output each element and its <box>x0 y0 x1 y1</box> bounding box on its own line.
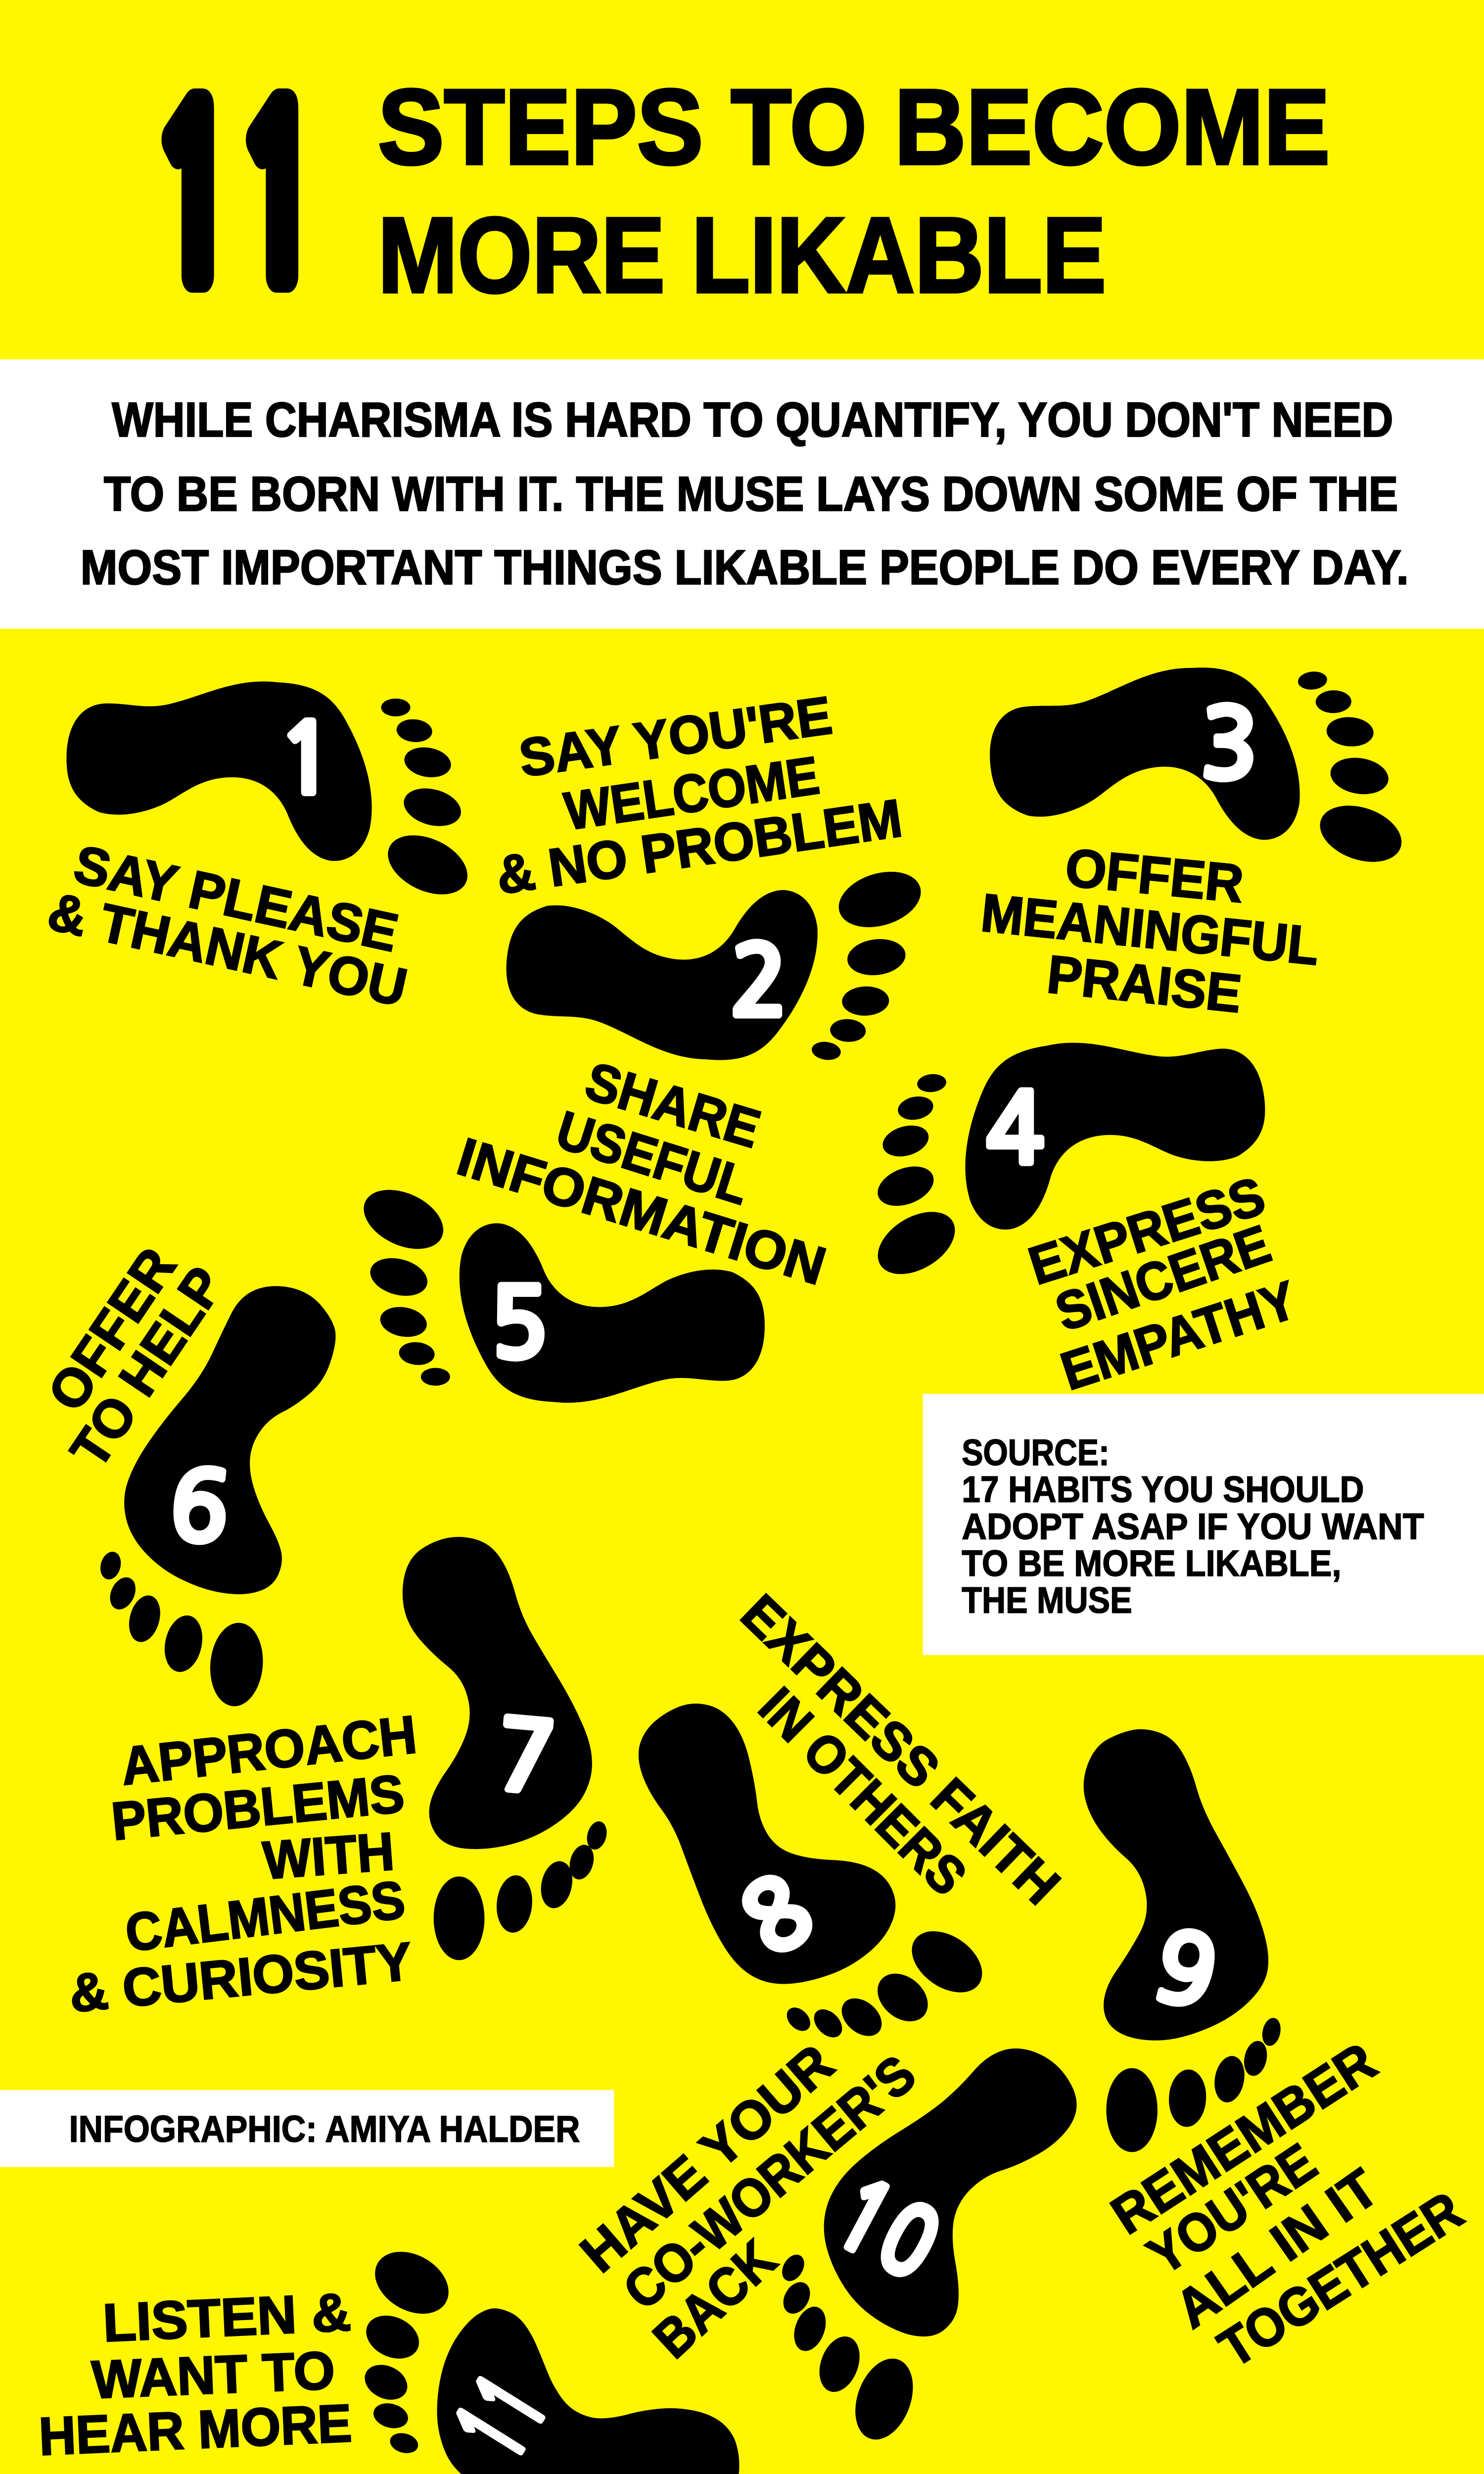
step 5 label: USEFUL <box>550 1099 756 1216</box>
step 3 label: PRAISE <box>1044 944 1244 1024</box>
title <box>378 67 1330 315</box>
step 8 footprint: 8 <box>727 1860 829 1973</box>
step 4 footprint: 4 <box>986 1082 1045 1178</box>
step 9 footprint: 9 <box>1147 1919 1224 2025</box>
step 2 label: & NO PROBLEM <box>493 788 906 905</box>
step 8 footprint <box>640 1705 992 2043</box>
panel: source: ADOPT ASAP IF YOU WANT <box>962 1506 1424 1547</box>
step 11 footprint <box>360 2240 739 2474</box>
step 7 label: & CURIOSITY <box>67 1931 415 2023</box>
step 9 label <box>1101 2031 1473 2379</box>
step 3 label: OFFER <box>1063 837 1246 914</box>
panel: credit <box>0 2090 614 2167</box>
step 2 label <box>493 685 906 905</box>
step 11 label: HEAR MORE <box>38 2393 353 2467</box>
step 11 label <box>38 2282 353 2467</box>
panel: source: THE MUSE <box>962 1580 1132 1621</box>
step 10 label: CO-WORKER'S <box>612 2044 927 2321</box>
step 1 label: & THANK YOU <box>43 881 412 1018</box>
title: STEPS TO BECOME <box>378 67 1330 187</box>
step 5 label: SHARE <box>579 1050 767 1159</box>
panel: source: 17 HABITS YOU SHOULD <box>962 1469 1364 1510</box>
step 4 label: EMPATHY <box>1054 1269 1303 1401</box>
step 10 footprint <box>779 2049 1076 2446</box>
step 4 label: EXPRESS <box>1021 1165 1272 1296</box>
step 10 footprint: 10 <box>819 2165 953 2297</box>
panel: source <box>923 1394 1484 1655</box>
step 10 label <box>569 2033 927 2369</box>
step 4 footprint <box>848 1023 1280 1289</box>
panel: source: TO BE MORE LIKABLE, <box>962 1543 1341 1584</box>
step 7 footprint: 7 <box>492 1708 559 1808</box>
step 5 label: INFORMATION <box>451 1126 833 1296</box>
step 7 label: APPROACH <box>118 1704 419 1796</box>
step 9 label: TOGETHER <box>1208 2180 1473 2379</box>
step 4 label: SINCERE <box>1048 1213 1278 1342</box>
step 5 label <box>451 1050 833 1296</box>
step 1 footprint: 1 <box>277 713 336 809</box>
step 7 label <box>67 1704 419 2023</box>
step 5 footprint: 5 <box>490 1277 549 1373</box>
step 6 footprint: 6 <box>167 1458 232 1558</box>
step 10 label: HAVE YOUR <box>569 2033 844 2284</box>
title: MORE LIKABLE <box>378 195 1106 315</box>
step 6 footprint <box>98 1287 335 1708</box>
step 3 label: MEANINGFUL <box>978 882 1322 976</box>
step 3 label <box>978 837 1322 1024</box>
title: big number 11: 11 <box>152 84 321 312</box>
panel: source: SOURCE: <box>962 1432 1110 1473</box>
step 1 label: SAY PLEASE <box>69 834 403 963</box>
step 8 label: IN OTHERS <box>748 1676 978 1906</box>
step 9 label: YOU'RE <box>1137 2132 1327 2286</box>
step 11 footprint: 11 <box>442 2362 563 2474</box>
step 11 label: LISTEN & <box>101 2282 352 2353</box>
step 7 footprint <box>403 1538 608 1959</box>
step 4 label <box>1021 1165 1303 1401</box>
step 2 label: SAY YOU'RE <box>515 685 835 788</box>
step 3 footprint: 3 <box>1200 698 1259 794</box>
step 1 footprint <box>66 681 477 906</box>
panel: intro <box>0 359 1484 629</box>
step 5 footprint <box>354 1178 765 1403</box>
step 8 label: EXPRESS FAITH <box>730 1583 1071 1915</box>
step 9 footprint <box>1084 1730 1282 2151</box>
step 7 label: CALMNESS <box>122 1869 408 1963</box>
step 2 footprint: 2 <box>730 935 788 1031</box>
step 6 label: OFFER <box>36 1237 187 1421</box>
panel: credit: INFOGRAPHIC: AMIYA HALDER <box>69 2108 580 2150</box>
step 9 label: REMEMBER <box>1101 2031 1387 2245</box>
step 3 footprint <box>982 646 1414 913</box>
step 7 label: PROBLEMS <box>109 1763 407 1852</box>
step 11 label: WANT TO <box>91 2340 336 2410</box>
step 2 footprint <box>497 808 934 1088</box>
step 2 label: WELCOME <box>560 745 823 841</box>
step 6 label: TO HELP <box>59 1256 235 1478</box>
step 9 label: ALL IN IT <box>1164 2157 1389 2339</box>
step 10 label: BACK <box>642 2229 788 2369</box>
step 7 label: WITH <box>261 1821 396 1890</box>
